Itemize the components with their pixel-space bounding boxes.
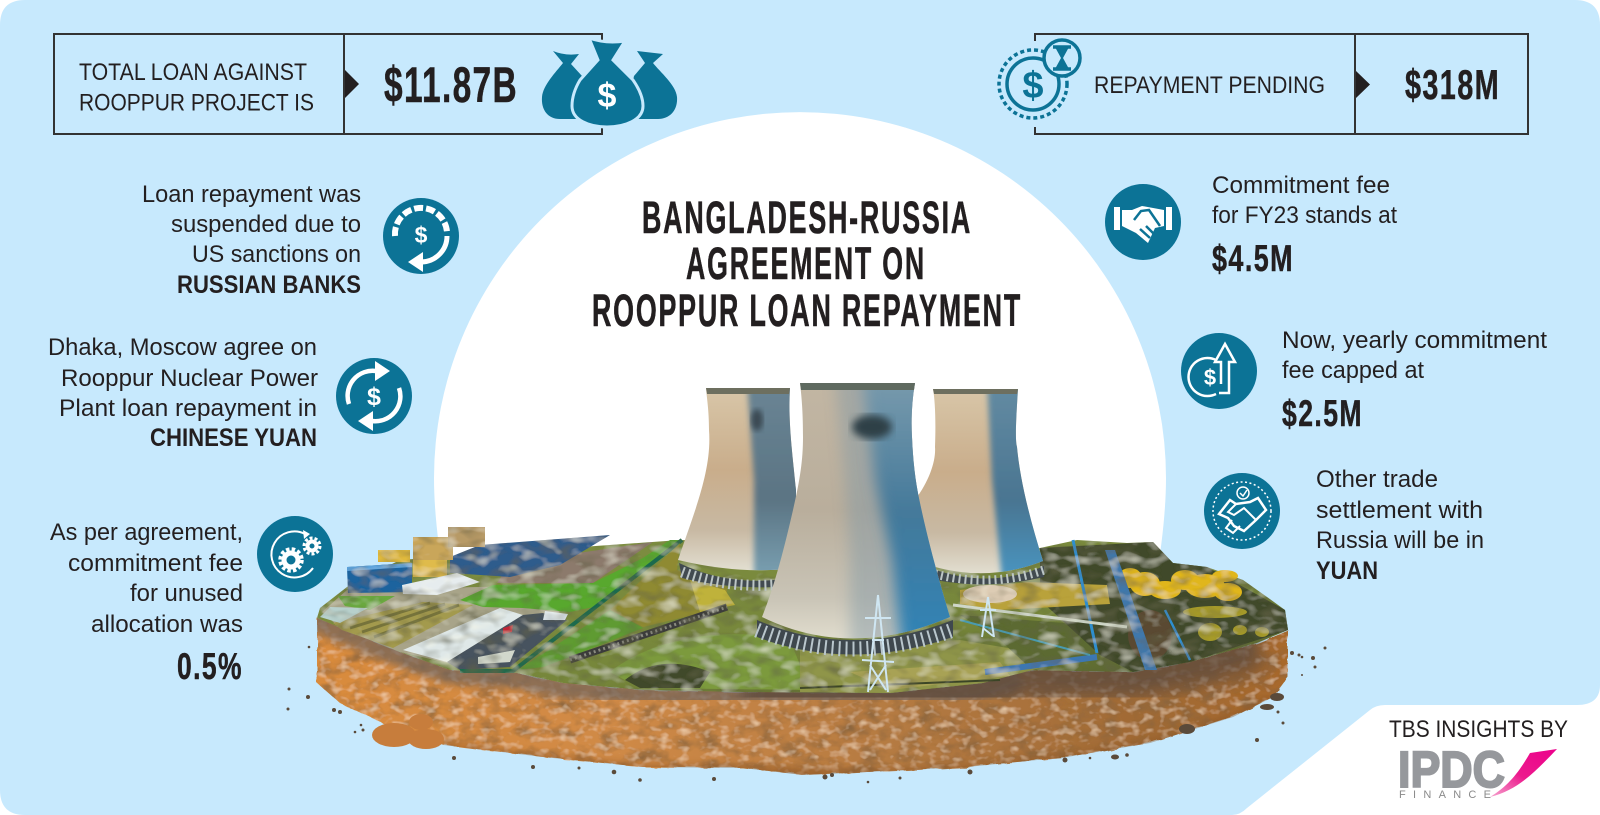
industrial complex — [320, 527, 682, 671]
icon: coin with hourglass — [999, 40, 1080, 118]
repayment pending box: $318M — [1405, 61, 1500, 108]
left note: suspended repayment: US sanctions on — [192, 241, 361, 268]
left note: commitment fee — [50, 519, 243, 687]
icon: coin with hourglass: $ — [1022, 65, 1044, 107]
repayment pending box: REPAYMENT PENDING — [1094, 72, 1325, 99]
icon: dollar with circular arrows: $ — [367, 383, 381, 411]
left note: suspended repayment: RUSSIAN BANKS — [177, 271, 361, 299]
left note: yuan repayment: Rooppur Nuclear Power — [61, 365, 318, 392]
right cooling tower — [918, 389, 1045, 585]
left note: commitment fee: commitment fee — [68, 550, 243, 577]
right note: trade settlement: YUAN — [1316, 557, 1378, 585]
falling debris — [286, 646, 1326, 783]
left note: commitment fee: 0.5% — [177, 646, 243, 687]
total loan box — [54, 34, 602, 134]
left cooling tower — [678, 388, 796, 591]
title: ROOPPUR LOAN REPAYMENT — [592, 285, 1022, 336]
grass and fields — [518, 543, 1095, 693]
logo: IPDC Finance: IPDC — [1398, 741, 1505, 798]
repayment pending box — [1035, 34, 1528, 134]
footer credit panel: TBS INSIGHTS BY — [1389, 716, 1568, 743]
right note: FY23 commitment fee: Commitment fee — [1212, 172, 1390, 199]
left note: yuan repayment — [48, 334, 318, 452]
soil body — [317, 612, 1288, 777]
right note: yearly cap — [1282, 327, 1547, 434]
icon: dollar with circular arrows — [336, 358, 412, 434]
total loan box: $11.87B — [384, 57, 518, 113]
icon: dollar with up arrow: $ — [1204, 365, 1216, 390]
total loan box: ROOPPUR PROJECT IS — [79, 90, 314, 116]
icon: dollar with return arrow — [383, 198, 459, 274]
left note: commitment fee: for unused — [130, 580, 243, 607]
left note: yuan repayment: Dhaka, Moscow agree on — [48, 334, 317, 361]
icon: dollar with return arrow: $ — [415, 222, 428, 248]
icon: handshake — [1105, 184, 1181, 260]
center cooling tower — [754, 383, 953, 656]
footer credit panel — [1389, 716, 1568, 801]
white central circle — [434, 112, 1166, 640]
left note: commitment fee: As per agreement, — [50, 519, 243, 546]
icon: money bags: $ — [598, 77, 617, 115]
right note: FY23 commitment fee — [1212, 172, 1397, 279]
left note: commitment fee: allocation was — [91, 611, 243, 638]
left note: suspended repayment: suspended due to — [171, 211, 361, 238]
right note: trade settlement: Other trade — [1316, 466, 1438, 493]
right side fields and trees — [953, 540, 1288, 672]
right note: trade settlement — [1316, 466, 1484, 585]
transmission pylons — [862, 595, 996, 692]
right note: yearly cap: fee capped at — [1282, 357, 1424, 384]
icon: dotted handshake — [1204, 473, 1280, 549]
left note: suspended repayment — [142, 181, 361, 299]
right note: trade settlement: Russia will be in — [1316, 527, 1484, 554]
right note: trade settlement: settlement with — [1316, 497, 1483, 524]
logo: IPDC Finance: FINANCE — [1399, 789, 1491, 801]
island with cooling towers — [286, 375, 1326, 783]
autumn trees — [1118, 568, 1242, 601]
right note: yearly cap: Now, yearly commitment — [1282, 327, 1547, 354]
left note: suspended repayment: Loan repayment was — [142, 181, 361, 208]
title: BANGLADESH-RUSSIA — [642, 192, 972, 243]
left note: yuan repayment: Plant loan repayment in — [59, 395, 317, 422]
title: AGREEMENT ON — [686, 238, 926, 289]
right note: FY23 commitment fee: $4.5M — [1212, 238, 1294, 279]
icon: dollar with up arrow — [1181, 333, 1257, 409]
title — [592, 192, 1022, 336]
right note: yearly cap: $2.5M — [1282, 393, 1363, 434]
left note: yuan repayment: CHINESE YUAN — [150, 424, 317, 452]
right note: FY23 commitment fee: for FY23 stands at — [1212, 202, 1397, 229]
icon: gears — [257, 516, 333, 592]
total loan box: TOTAL LOAN AGAINST — [79, 59, 307, 86]
icon: money bags — [542, 38, 677, 127]
land surface — [317, 527, 1288, 693]
loose rocks — [372, 714, 444, 749]
